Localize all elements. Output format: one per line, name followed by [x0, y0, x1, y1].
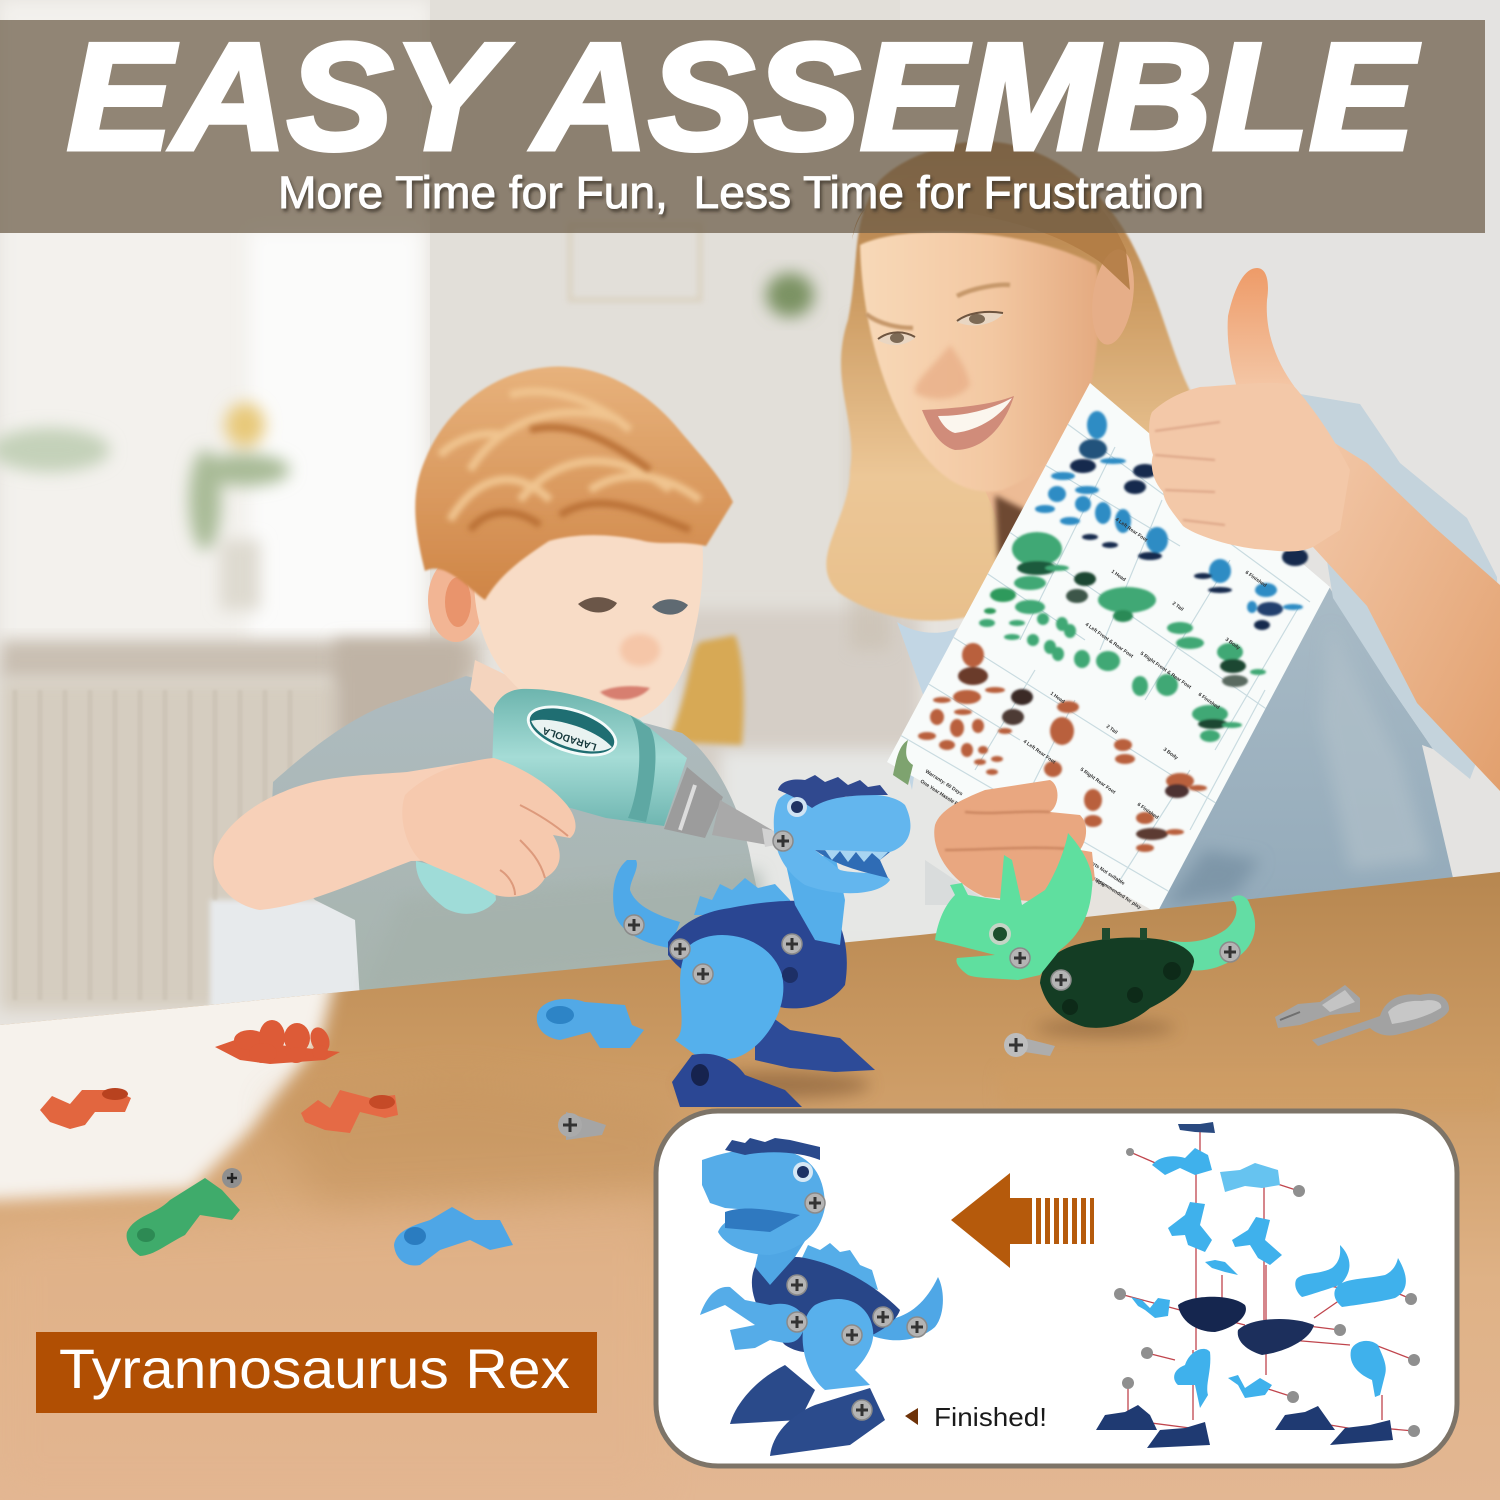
sheet: step labels: 6 Finished — [1244, 570, 1268, 589]
wooden table — [0, 872, 1500, 1500]
lower hand holding sheet — [934, 780, 1095, 902]
assembly card — [656, 1111, 1457, 1466]
small screws — [1114, 1148, 1420, 1437]
tail — [613, 860, 680, 948]
navy feet — [1096, 1405, 1393, 1448]
sheet: step labels: care of 40% — [1079, 869, 1106, 889]
thumbs-up hand — [1149, 268, 1350, 551]
sheet: step labels: Warranty: 60 Days — [924, 769, 964, 797]
loose part: orange leg left — [40, 1088, 131, 1129]
tail — [1168, 895, 1255, 970]
sheet: step labels: 3 Body — [1224, 637, 1241, 651]
instruction sheet — [887, 383, 1330, 913]
crest — [778, 775, 888, 808]
shirt body — [1157, 585, 1453, 915]
near foot — [672, 1054, 802, 1107]
sheet: step labels: 3 Body — [1162, 747, 1179, 761]
neck — [470, 660, 600, 740]
sheet: step labels: 2 Tail — [1105, 724, 1119, 736]
nose — [620, 634, 660, 666]
eye — [787, 797, 807, 817]
sheet: step labels: 2 Tail — [1171, 601, 1185, 613]
loose part: orange leg right — [301, 1090, 398, 1133]
eyes — [578, 597, 688, 615]
label: Tyrannosaurus Rex: Tyrannosaurus Rex — [59, 1337, 570, 1400]
head — [702, 1149, 825, 1255]
subtitle: More Time for Fun, Less Time for Frustration — [278, 167, 1204, 218]
finished label: Finished! — [934, 1402, 1047, 1432]
toy drill — [492, 689, 792, 847]
tool bit — [1275, 985, 1360, 1028]
loose part: blue foot — [394, 1207, 513, 1266]
hair — [826, 141, 1195, 621]
drill grip base — [416, 861, 496, 914]
sheet: green dinosaur — [979, 532, 1266, 742]
loose part: blue mouth piece — [537, 999, 644, 1048]
navy spine — [1178, 1122, 1215, 1133]
mouth — [725, 1209, 800, 1232]
sheet: step labels: 1 Head — [1049, 691, 1066, 705]
loose part: orange spikes — [215, 1020, 340, 1064]
drill logo — [521, 696, 623, 766]
back spikes — [694, 878, 795, 915]
screws — [1010, 942, 1240, 990]
eye — [989, 923, 1011, 945]
triceratops parts — [935, 833, 1255, 1028]
drill chuck — [664, 767, 723, 838]
fist — [402, 758, 576, 897]
drill logo: LARADOLA — [541, 724, 598, 752]
shirt left — [897, 622, 958, 790]
tail — [870, 1277, 943, 1340]
sheet: step labels: 6 Finished — [1136, 802, 1160, 821]
screws — [787, 1193, 927, 1420]
hair over forehead — [852, 170, 1130, 290]
body — [752, 1257, 900, 1352]
label: Tyrannosaurus Rex — [36, 1332, 597, 1413]
sheet: step labels: 4 Left Rear Foot — [1022, 739, 1057, 766]
sleeve — [1300, 394, 1500, 779]
neck — [785, 855, 845, 945]
connector lines — [1120, 1128, 1414, 1431]
exploded parts — [1096, 1122, 1420, 1448]
eye — [793, 1162, 813, 1182]
background room — [0, 0, 1500, 1100]
neck — [985, 390, 1100, 550]
sheet: step labels: 4 Left Front & Rear Foot — [1084, 622, 1134, 660]
sheet: step labels: 5 Right Rear Foot — [1079, 767, 1117, 796]
eyebrows — [866, 285, 1010, 328]
arm — [213, 758, 494, 910]
smile — [922, 396, 1014, 450]
loose part: grey screw — [558, 1112, 606, 1140]
sheet: step labels: 1 Head — [1110, 569, 1127, 583]
head — [774, 790, 910, 893]
arms — [700, 1287, 805, 1350]
sheet: step labels: 5 Right Front & Rear Foot — [1139, 651, 1192, 691]
sheet: step labels: parts Not suitable — [1087, 859, 1126, 887]
nose — [915, 345, 970, 399]
loose part: green foot — [127, 1178, 240, 1256]
mouth — [600, 686, 650, 700]
sheet: brown dinosaur — [918, 643, 1207, 852]
thigh — [803, 1299, 873, 1390]
table shadows — [680, 1020, 1175, 1099]
face — [474, 523, 703, 722]
sheet: step labels: 4 Left Rear Foot — [1114, 517, 1149, 544]
sheet: step labels — [919, 517, 1268, 911]
assembly arrow — [951, 1173, 1094, 1268]
potted flower — [0, 403, 290, 610]
screws — [624, 831, 802, 984]
ear — [1087, 247, 1139, 347]
far foot — [755, 1005, 875, 1072]
yellow cushion — [668, 635, 744, 745]
ear — [428, 558, 484, 642]
sheet: step labels: 6 Finished — [1197, 692, 1221, 711]
sheet: step labels: recommended for play — [1094, 877, 1142, 911]
table reflection — [0, 960, 1500, 1500]
face — [860, 232, 1099, 491]
navy body — [668, 901, 847, 1008]
mouth — [815, 850, 890, 878]
loose screw near triceratops — [1004, 1033, 1055, 1057]
light-blue parts — [1131, 1148, 1406, 1408]
screwdriver wrench — [1312, 994, 1449, 1046]
blue dinosaur on table — [613, 775, 910, 1107]
finished dinosaur — [700, 1138, 943, 1456]
eyes — [878, 312, 1003, 345]
sheet: blue dinosaur — [1035, 411, 1308, 630]
crest — [725, 1138, 820, 1160]
neck — [755, 1225, 815, 1285]
sheet: long-neck dinosaur — [893, 740, 913, 785]
finished marker — [905, 1408, 918, 1425]
woman — [826, 141, 1500, 915]
shirt — [270, 676, 770, 1000]
near leg — [675, 935, 783, 1062]
forearm — [1293, 385, 1500, 791]
child — [213, 367, 792, 1000]
spikes — [800, 1243, 878, 1290]
hair — [415, 367, 733, 600]
dark green body — [1040, 938, 1194, 1028]
teeth — [825, 850, 888, 862]
feet — [730, 1365, 815, 1424]
head — [935, 833, 1092, 980]
sheet: step labels: One Year Hassle Free — [919, 779, 965, 812]
loose part: small screw — [222, 1168, 242, 1188]
top banner — [0, 12, 1485, 233]
title: EASY ASSEMBLE — [67, 12, 1420, 182]
navy body halves — [1178, 1297, 1314, 1355]
